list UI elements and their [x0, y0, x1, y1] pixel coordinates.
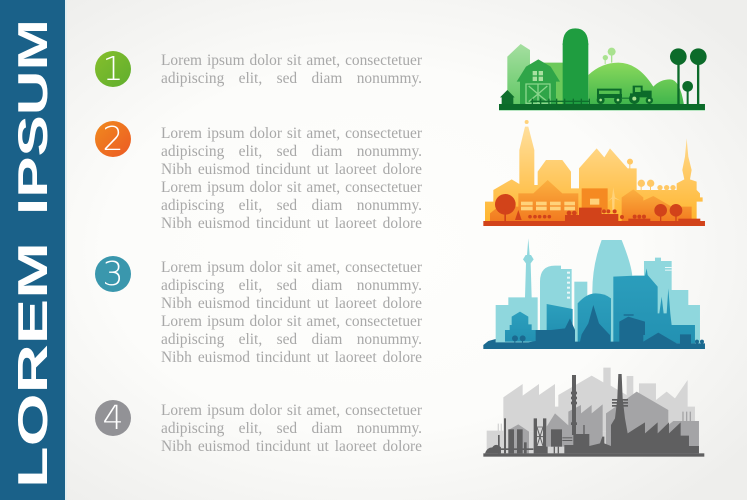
text block 1: [161, 52, 422, 87]
text block 4: [161, 402, 422, 455]
illustration: orange town: [483, 120, 705, 226]
title: IPSUM: [9, 19, 56, 215]
number badge 1: 1: [102, 49, 124, 88]
illustration: blue city skyline: [483, 238, 705, 349]
text block 2: Lorem ipsum dolor sit amet, consectetuer: [161, 179, 422, 196]
text block 1: Lorem ipsum dolor sit amet, consectetuer: [161, 52, 422, 69]
text block 2: [161, 125, 422, 232]
text block 3: Nibh euismod tincidunt ut laoreet dolore: [161, 295, 422, 312]
text block 4: adipiscing elit, sed diam nonummy.: [161, 420, 422, 437]
number badge 2: [95, 121, 131, 157]
text block 4: Lorem ipsum dolor sit amet, consectetuer: [161, 402, 422, 419]
number badge 4: 4: [102, 398, 124, 437]
title: LOREM: [9, 242, 56, 488]
text block 3: adipiscing elit, sed diam nonummy.: [161, 277, 422, 294]
text block 3: Lorem ipsum dolor sit amet, consectetuer: [161, 259, 422, 276]
number badge 2: 2: [102, 119, 124, 158]
text block 3: Lorem ipsum dolor sit amet, consectetuer: [161, 313, 422, 330]
number badge 3: [95, 256, 131, 292]
text block 2: adipiscing elit, sed diam nonummy.: [161, 197, 422, 214]
title: [9, 19, 56, 488]
text block 3: Nibh euismod tincidunt ut laoreet dolore: [161, 349, 422, 366]
text block 4: Nibh euismod tincidunt ut laoreet dolore: [161, 438, 422, 455]
text block 2: Nibh euismod tincidunt ut laoreet dolore: [161, 161, 422, 178]
illustration: grey industrial skyline: [483, 368, 704, 457]
text block 3: adipiscing elit, sed diam nonummy.: [161, 331, 422, 348]
panel: blue sidebar with vertical title: [0, 0, 67, 500]
text block 2: Nibh euismod tincidunt ut laoreet dolore: [161, 215, 422, 232]
text block 2: adipiscing elit, sed diam nonummy.: [161, 143, 422, 160]
number badge 1: [95, 51, 131, 87]
text block 3: [161, 259, 422, 366]
text block 2: Lorem ipsum dolor sit amet, consectetuer: [161, 125, 422, 142]
illustration: green farm: [499, 28, 707, 111]
number badge 4: [95, 400, 131, 436]
number badge 3: 3: [102, 254, 124, 293]
text block 1: adipiscing elit, sed diam nonummy.: [161, 70, 422, 87]
